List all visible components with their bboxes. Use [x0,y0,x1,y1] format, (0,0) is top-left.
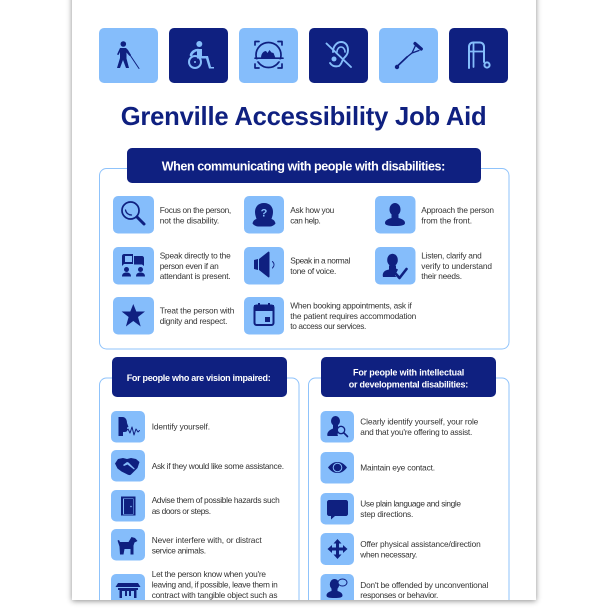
section heading [127,148,481,183]
section heading [321,357,496,397]
item: speak directly [113,247,231,284]
item: listen, clarify, verify [375,247,492,284]
item: hazards: as doors or steps. [152,506,211,516]
panel: intellectual or developmental disabilities [308,357,509,608]
item: booking appointments: the patient requires accommodation [290,311,417,321]
section heading: For people with intellectual [353,368,464,378]
item: focus on the person: not the disability. [160,215,219,225]
item: hazards: Advise them of possible hazards such [152,495,280,505]
item: approach from the front: Approach the person [421,205,494,215]
item: booking appointments [244,297,417,334]
item: dignity and respect: Treat the person with [160,306,235,316]
item: focus on the person [113,196,231,234]
item: listen, clarify, verify: Listen, clarify and [421,250,482,260]
item: booking appointments: When booking appointments, ask if [290,300,412,310]
item: normal tone of voice: tone of voice. [290,266,336,276]
item: normal tone of voice: Speak in a normal [290,256,350,266]
item: hazards [111,490,280,522]
item: leaving, tangible object: Let the person know when you're [152,569,266,579]
section heading: or developmental disabilities: [349,380,468,390]
item: speak directly: person even if an [160,261,219,271]
item: identify yourself: Identify yourself. [152,422,210,432]
section heading: When communicating with people with disabilities: [162,160,445,174]
item: service animals: service animals. [152,546,206,556]
icon: crutch [379,28,438,83]
item: clearly identify yourself [320,411,479,442]
item: listen, clarify, verify: their needs. [421,271,462,281]
item: listen, clarify, verify: verify to understand [421,261,492,271]
item: ask how you can help: ? [261,208,268,220]
item: approach from the front [375,196,494,234]
item: clearly identify yourself: and that you're offering to assist. [360,427,472,437]
item: ask for assistance: Ask if they would like some assistance. [152,461,284,471]
icon: vision scan [239,28,298,83]
item: identify yourself [111,411,210,442]
item: ask how you can help: Ask how you [290,205,335,215]
item: speak directly: Speak directly to the [160,250,231,260]
item: leaving, tangible object: contract with tangible object such as [152,590,278,600]
item: ask how you can help: can help. [290,215,321,225]
item: speak directly: attendant is present. [160,271,231,281]
item: clearly identify yourself: Clearly identify yourself, your role [360,416,479,426]
section heading [112,357,287,397]
item: plain language: Use plain language and single [360,498,461,508]
item: dignity and respect: dignity and respect. [160,316,227,326]
item: leaving, tangible object: leaving and, if possible, leave them in [152,580,278,590]
item: normal tone of voice [244,247,350,284]
icon: wheelchair user [169,28,228,83]
item: physical assistance: when necessary. [359,550,417,560]
panel: vision impaired [100,357,299,608]
section heading: For people who are vision impaired: [127,373,271,383]
panel: when communicating [100,148,509,349]
item: ask for assistance [111,450,284,482]
icon row [99,28,508,83]
item: booking appointments: to access our services. [290,321,366,331]
item: leaving, tangible object [111,571,278,600]
item: unconventional responses: Don't be offended by unconventional [360,580,488,590]
item: plain language [320,493,461,524]
item: unconventional responses: responses or behavior. [360,590,438,600]
item: focus on the person: Focus on the person, [160,205,231,215]
item: service animals [111,529,262,560]
icon: walker [449,28,508,83]
icon: person with white cane [99,28,158,83]
item: physical assistance [320,533,481,565]
item: maintain eye contact [320,452,435,484]
item: service animals: Never interfere with, or distract [152,535,262,545]
icon: hearing impaired ear [309,28,368,83]
page sheet [72,0,536,600]
item: approach from the front: from the front. [421,215,472,225]
item: ask how you can help [244,196,335,234]
item: maintain eye contact: Maintain eye contact. [360,462,435,472]
item: dignity and respect [113,297,235,334]
item: plain language: step directions. [360,509,413,519]
item: physical assistance: Offer physical assistance/direction [360,539,481,549]
page content [99,28,509,608]
item: unconventional responses [320,574,488,600]
title: Grenville Accessibility Job Aid [121,103,487,131]
